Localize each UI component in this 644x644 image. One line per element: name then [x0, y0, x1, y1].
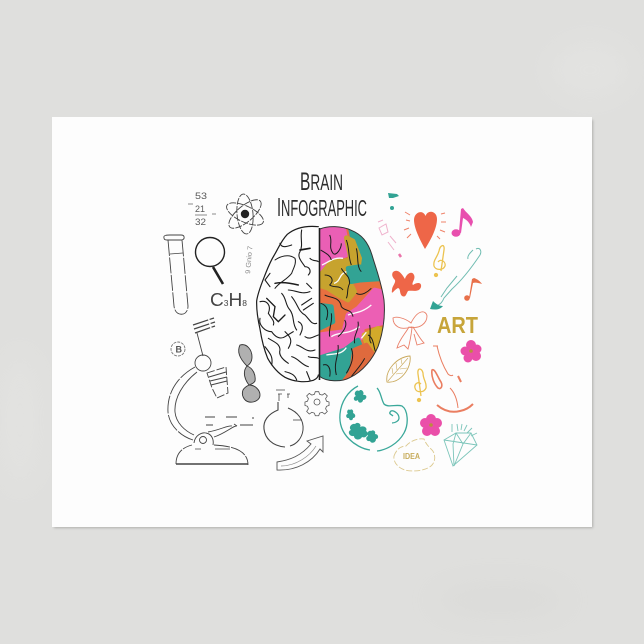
icon: coin — [171, 342, 185, 356]
icon: paint brush — [430, 248, 481, 310]
brain — [257, 225, 390, 385]
title: INFOGRAPHIC — [277, 192, 367, 222]
icon: yellow treble clef — [434, 246, 445, 276]
brain midline — [318, 228, 320, 380]
icon: test tube — [164, 235, 188, 314]
right hemisphere — [320, 226, 385, 382]
icon: heart — [404, 212, 446, 249]
icon: coin: B — [176, 344, 182, 354]
icon: magnifying glass — [196, 238, 224, 284]
icon: small treble clef — [415, 369, 426, 402]
title — [277, 168, 367, 222]
palette paint blobs — [346, 390, 378, 443]
math sums — [188, 191, 216, 227]
icon: idea cloud — [394, 439, 435, 471]
icon: bow — [393, 312, 427, 349]
icon: microscope — [168, 318, 254, 465]
icon: idea cloud: IDEA — [403, 451, 420, 461]
icon: pink flower small — [420, 414, 442, 436]
icon: pink flower — [460, 340, 482, 362]
icon: violin — [432, 346, 473, 412]
title: BRAIN — [300, 168, 343, 196]
vertical scribble: 9 Gnio 7 — [245, 246, 254, 274]
pink sketch — [378, 220, 401, 257]
label: ART: ART — [437, 312, 478, 338]
icon: gear — [305, 392, 329, 416]
icon: flask — [264, 390, 303, 447]
icon: atom — [223, 193, 267, 235]
math sums: 53 — [195, 191, 207, 201]
icon: curved arrow — [277, 436, 323, 470]
math sums: 32 — [195, 217, 206, 227]
right hemisphere colours — [320, 227, 384, 380]
formula: C3H8 — [210, 290, 248, 310]
icon: palette — [340, 386, 407, 451]
right hemisphere outline — [320, 227, 384, 381]
icon: dna helix — [239, 345, 260, 402]
icon: leaf — [387, 356, 410, 382]
icon: orange music note — [464, 278, 482, 301]
math sums: 21 — [195, 204, 205, 214]
icon: teal flag and dot — [388, 193, 399, 210]
right hemisphere folds — [321, 235, 376, 377]
left hemisphere — [257, 226, 318, 382]
panel: postcard — [52, 117, 592, 527]
postcard shadow — [54, 120, 593, 528]
infographic canvas — [52, 117, 594, 530]
icon: pink music note — [452, 208, 473, 237]
icon: orange splat — [392, 271, 421, 297]
icon: diamond — [444, 424, 477, 466]
